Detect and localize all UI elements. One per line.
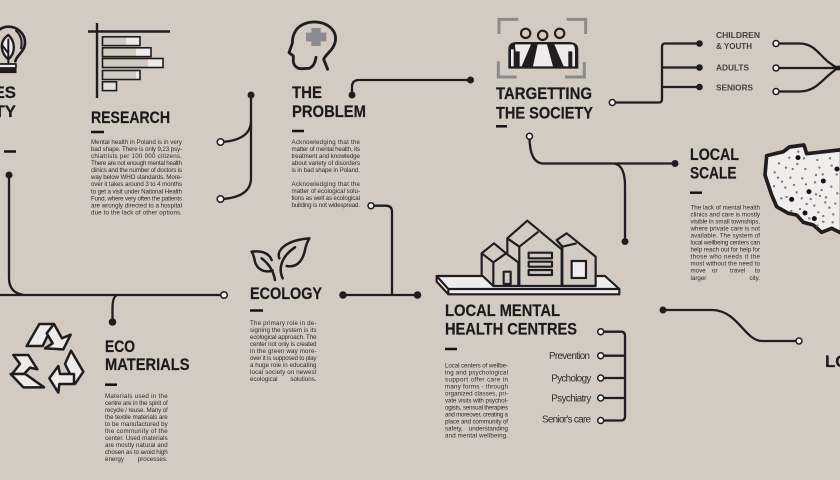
panel: eco materials	[11, 324, 189, 463]
heading: THE	[292, 83, 322, 102]
list: services	[542, 351, 592, 426]
connector: age group tree	[609, 40, 703, 106]
text block: are mostly natural and	[105, 442, 168, 449]
text block: move	[690, 268, 706, 275]
text block: center. Used materials	[105, 435, 168, 442]
text block: city.	[749, 275, 760, 282]
text block: ecological approach. The	[250, 334, 317, 341]
text block: where private care is not	[690, 226, 760, 233]
text block: is in bad shape in Poland.	[292, 167, 360, 174]
icon: light bulb with leaf	[0, 27, 25, 73]
text block: center not only is created	[250, 341, 317, 348]
text block: to be manufactured by	[105, 421, 169, 428]
text block: centre are in the spirit of	[105, 400, 168, 407]
text block: larger	[690, 275, 706, 282]
text block: visible in small townships,	[690, 219, 760, 226]
dash	[250, 309, 263, 312]
connector: research branches	[217, 92, 254, 202]
text block: in the green way more-	[250, 348, 316, 355]
text block: safety,	[445, 425, 463, 432]
text block: The primary role in de-	[250, 320, 316, 327]
text block: ogists, sensual therapies	[445, 404, 508, 411]
text block: vate visits with psychol-	[445, 397, 508, 404]
text block: Local centers of wellbe-	[445, 362, 508, 369]
text block: There are not enough mental health	[91, 160, 183, 167]
text block: due to the lack of other options.	[91, 209, 182, 216]
connector: age groups merge	[773, 40, 840, 94]
text block: recycle / reuse. Many of	[105, 407, 168, 414]
text block: Fund, where very often the patients	[91, 195, 182, 202]
text block: over it is supposed to play	[250, 355, 317, 362]
text block: matter of mental health, its	[292, 146, 360, 153]
heading	[690, 145, 739, 183]
panel: local scale	[690, 145, 840, 282]
text block: energy	[105, 456, 125, 463]
heading: SCALE	[690, 164, 736, 183]
text block: are wrongly directed to a hospital	[91, 202, 182, 209]
text block: way below WHO standards. More-	[90, 174, 182, 181]
text block: building is not widespread.	[292, 202, 360, 209]
heading	[292, 83, 366, 121]
labels: age groups: CHILDREN	[716, 30, 760, 40]
text block: treatment and knowledge	[292, 153, 361, 160]
text block: local wellbeing centers can	[690, 240, 761, 247]
dash	[445, 348, 457, 350]
dash	[496, 125, 507, 128]
labels: age groups: SENIORS	[716, 82, 753, 92]
text block: chosen as to avoid high	[105, 449, 168, 456]
panel: targetting the society	[496, 19, 593, 126]
text block	[105, 393, 169, 463]
text block: solutions.	[290, 376, 317, 383]
icon: recycle arrows	[11, 324, 83, 393]
text block: signing the system is its	[250, 327, 316, 334]
heading	[445, 301, 577, 339]
heading: MATERIALS	[105, 355, 190, 374]
text block: and mental wellbeing.	[445, 432, 508, 440]
map: Poland with dots	[765, 145, 840, 233]
heading: ECOLOGY	[250, 284, 322, 303]
text block: Materials used in the	[105, 393, 168, 400]
dash	[91, 131, 104, 133]
text block: ing and psychological	[445, 369, 508, 376]
heading: LOCAL MENTAL	[445, 301, 560, 320]
panel: resources for society (cropped)	[0, 27, 25, 151]
connector: lower right s-curve	[660, 306, 802, 344]
text block: to get a visit under National Health	[91, 188, 183, 195]
connector: ecology link	[339, 203, 421, 299]
icon: head with cross	[289, 22, 336, 69]
text block: the community of the	[105, 428, 168, 435]
text block: a huge role in educating	[250, 362, 317, 369]
text block: over it takes around 3 to 4 months	[91, 181, 182, 188]
panel: research	[88, 23, 183, 216]
text block	[445, 362, 509, 440]
dash	[292, 130, 304, 132]
dash	[690, 191, 702, 194]
text block: travel	[730, 268, 745, 275]
list: services: Prevention	[549, 351, 590, 362]
text block	[250, 320, 317, 383]
text block: organized classes, pri-	[445, 390, 508, 397]
text block: chiatrists per 100 000 citizens.	[91, 153, 182, 160]
connector: services bracket	[598, 329, 625, 424]
dash	[4, 150, 16, 153]
panel: local mental health centres	[437, 221, 625, 440]
list: services: Senior's care	[542, 414, 592, 426]
icon: bar chart	[88, 23, 170, 98]
heading	[105, 337, 190, 374]
text block: or	[712, 268, 718, 275]
text block: to	[755, 268, 761, 275]
text block: clinics and the number of doctors is	[91, 167, 182, 174]
connector: society to local scale and centres	[526, 133, 678, 245]
text block: most without the need to	[690, 261, 761, 268]
text block: Acknowledging that the	[292, 139, 361, 146]
text block	[90, 139, 183, 216]
text block: Acknowledging that the	[292, 181, 361, 188]
connector: left trunk and branches	[0, 172, 227, 326]
heading: LOCAL	[690, 145, 739, 164]
text block: processes.	[138, 456, 168, 463]
icon: people in focus frame	[498, 19, 586, 77]
dash	[105, 383, 117, 386]
heading: PROBLEM	[292, 102, 366, 121]
heading: THE SOCIETY	[496, 103, 593, 122]
text block: clinics and care is mostly	[690, 212, 761, 219]
text block: tions as well as ecological	[292, 195, 360, 202]
text block: place and community of	[445, 418, 508, 425]
text block: many forms - through	[445, 383, 509, 390]
heading: resources society fragment	[0, 83, 16, 121]
text block: The lack of mental health	[690, 205, 761, 212]
text block: those who needs it the	[690, 254, 761, 261]
heading: ECO	[105, 337, 135, 356]
text block: support offer care in	[445, 376, 509, 383]
text block: the textile materials are	[105, 414, 168, 421]
text block: ecological	[250, 376, 278, 383]
text block: matter of ecological solu-	[292, 188, 360, 195]
text block: available. The system of	[690, 233, 760, 240]
text block	[292, 139, 361, 209]
text block: bad shape. There is only 9,23 psy-	[91, 146, 182, 153]
text block: understanding	[469, 425, 509, 432]
heading: RESEARCH	[91, 108, 170, 127]
labels: age groups	[716, 30, 760, 92]
text block: Mental health in Poland is in very	[91, 139, 183, 146]
text block: about variety of disorders	[292, 160, 360, 167]
text block: local society on newest	[250, 369, 317, 376]
panel: the problem	[289, 22, 366, 209]
text block	[690, 205, 761, 282]
icon: plant leaves	[252, 238, 309, 280]
heading: HEALTH CENTRES	[445, 320, 577, 339]
connector: problem to targetting	[348, 76, 474, 98]
heading: TARGETTING	[496, 84, 592, 103]
heading	[496, 84, 593, 122]
text block: help reach out for help for	[690, 247, 760, 254]
text block: and moreover, creating a	[445, 411, 509, 418]
labels: age groups: & YOUTH	[716, 41, 752, 51]
list: services: Psychiatry	[551, 394, 591, 404]
labels: age groups: ADULTS	[716, 62, 749, 72]
panel: ecology	[250, 238, 322, 383]
icon: houses on platform	[437, 221, 619, 294]
list: services: Pychology	[551, 374, 591, 384]
